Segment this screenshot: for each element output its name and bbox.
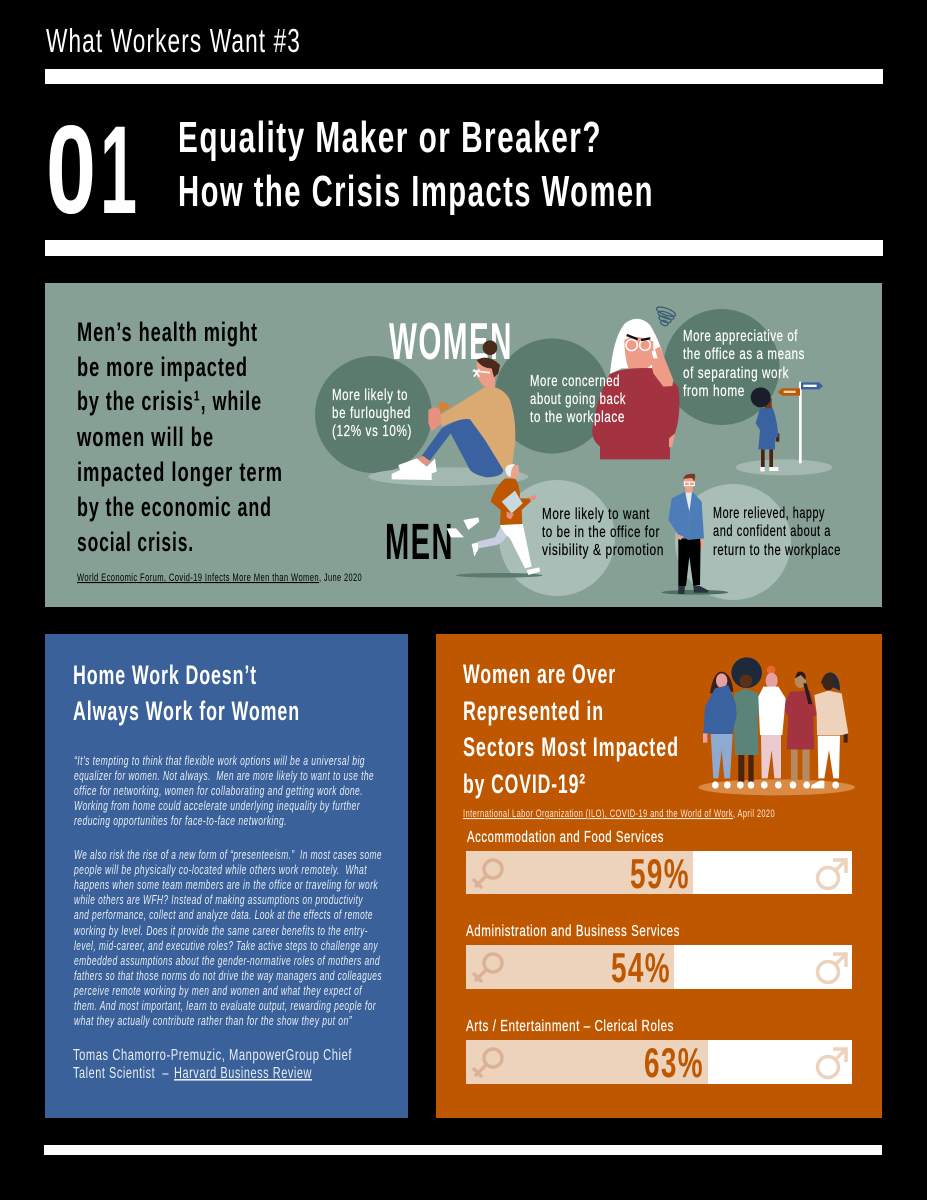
bar: administration and business services: 54% [611,944,671,991]
icon: male symbol [818,1049,846,1078]
callouts: circle text: (12% vs 10%) [332,423,412,440]
afro woman [731,657,762,789]
quote paragraph one: reducing opportunities for face-to-face networking. [74,813,287,828]
quote paragraph one [74,753,374,828]
title: How the Crisis Impacts Women [178,167,654,216]
source citation: International Labor Organization (ILO), COVID-19 and the World of Work [463,808,733,820]
main statement: by the crisis¹, while [77,386,262,416]
main statement: by the economic and [77,492,272,522]
illustration: seated woman [368,340,528,486]
bar: accommodation and food services: 59% [630,850,690,897]
callouts: circle text: More appreciative of [683,328,798,345]
icon: female symbol [473,1049,502,1077]
attribution [73,1047,352,1082]
title [178,113,654,216]
source citation: World Economic Forum, Covid-19 Infects More Men than Women [77,572,319,584]
bar: arts and entertainment: 63% [644,1039,704,1086]
quote paragraph two [73,847,382,1028]
quote paragraph two: what they actually contribute rather than for the show they put on” [74,1013,352,1028]
section number: 0 [46,101,96,240]
callouts: men text: and confident about a [713,523,831,540]
panel heading: Home Work Doesn’t [73,660,257,690]
quote paragraph two: and performance, collect and analyze data. Look at the effects of remote [74,907,373,922]
callouts: circle text: the office as a means [683,346,805,363]
header label: What Workers Want #3 [46,22,301,59]
quote paragraph two: level, mid-career, and executive roles? Take active steps to challenge any [74,938,379,953]
main statement: social crisis. [77,527,194,557]
panel heading: Always Work for Women [73,696,300,726]
panel heading: Sectors Most Impacted [463,732,679,762]
quote paragraph two: while others are WFH? Instead of making assumptions on productivity [74,892,364,907]
red dress woman [782,672,817,789]
main statement: be more impacted [77,352,248,382]
callouts: circle text: from home [683,383,745,400]
cream sweater woman [811,672,848,789]
source citation: , June 2020 [319,572,362,584]
quote paragraph two: fathers so that those norms do not drive the way managers and colleagues [74,968,382,983]
panel heading [463,659,679,799]
bar: accommodation and food services: Accommodation and Food Services [467,829,664,846]
panel: home work [45,634,408,1118]
panel heading: Women are Over [463,659,616,689]
women circles [315,309,780,473]
attribution: Talent Scientist – [73,1065,169,1082]
quote paragraph two: We also risk the rise of a new form of “presenteeism.” In most cases some [74,847,382,862]
callouts: circle text: More concerned [530,373,620,390]
callouts: circle text: be furloughed [332,405,411,422]
quote paragraph two: happens when some team members are in the office or traveling for work [74,877,379,892]
title: Equality Maker or Breaker? [178,113,602,162]
bar: administration and business services: Administration and Business Services [466,923,680,940]
callouts: circle text: More likely to [332,387,408,404]
callouts: circle text: about going back [530,391,626,408]
bar: arts and entertainment: Arts / Entertainment – Clerical Roles [466,1018,674,1035]
quote paragraph two: them. And most important, learn to evaluate output, rewarding people for [74,998,376,1013]
callouts: circle text [332,328,805,440]
illustration: person at signpost [736,382,832,475]
icon: female symbol [473,860,502,888]
source citation: , April 2020 [733,808,775,820]
panel: health and economic impact [45,283,882,607]
quote paragraph one: office for networking, women for collaborating and getting work done. [74,783,363,798]
panel: over-represented sectors [436,634,882,1118]
illustration: standing man [662,474,728,595]
men circles [499,480,791,600]
illustration: running man [447,464,543,578]
panel heading [73,660,300,726]
icon: male symbol [818,954,846,982]
attribution: Tomas Chamorro-Premuzic, ManpowerGroup Chief [73,1047,352,1064]
quote paragraph two: embedded assumptions about the gender-normative roles of mothers and [74,953,380,968]
white coat woman [758,666,786,789]
callouts: men text [542,505,841,559]
callouts: men text: More likely to want [542,506,650,523]
blue hoodie woman [703,672,737,789]
panel heading: Represented in [463,696,604,726]
main statement: impacted longer term [77,457,283,487]
section number: 1 [100,101,137,240]
attribution: Harvard Business Review [174,1065,312,1082]
icon: female symbol [473,954,502,982]
men label: MEN [385,513,454,570]
callouts: men text: return to the workplace [713,542,841,559]
quote paragraph one: equalizer for women. Not always. Men are more likely to want to use the [74,768,374,783]
callouts: circle text: of separating work [683,365,789,382]
illustration: group of five women [698,657,855,795]
illustration: worried woman [592,305,679,459]
quote paragraph two: working by level. Does it provide the same career benefits to the entry- [74,923,368,938]
callouts: men text: visibility & promotion [542,542,664,559]
icon: male symbol [818,860,846,888]
callouts: men text: More relieved, happy [713,505,825,522]
bar: arts and entertainment [466,1018,852,1086]
callouts: circle text: to the workplace [530,409,625,426]
quote paragraph two: people will be physically co-located while others work remotely. What [73,862,367,877]
main statement: Men’s health might [77,317,258,347]
panel heading: by COVID-19² [463,769,586,799]
callouts: men text: to be in the office for [542,524,660,541]
quote paragraph one: “It’s tempting to think that flexible work options will be a universal big [74,753,365,768]
main statement [76,317,283,557]
women label: WOMEN [389,313,513,371]
quote paragraph two: perceive remote working by men and women and what they expect of [73,983,362,998]
quote paragraph one: Working from home could accelerate underlying inequality by further [74,798,360,813]
bar: accommodation and food services [466,829,852,897]
bar: administration and business services [466,923,852,991]
main statement: women will be [76,422,214,452]
